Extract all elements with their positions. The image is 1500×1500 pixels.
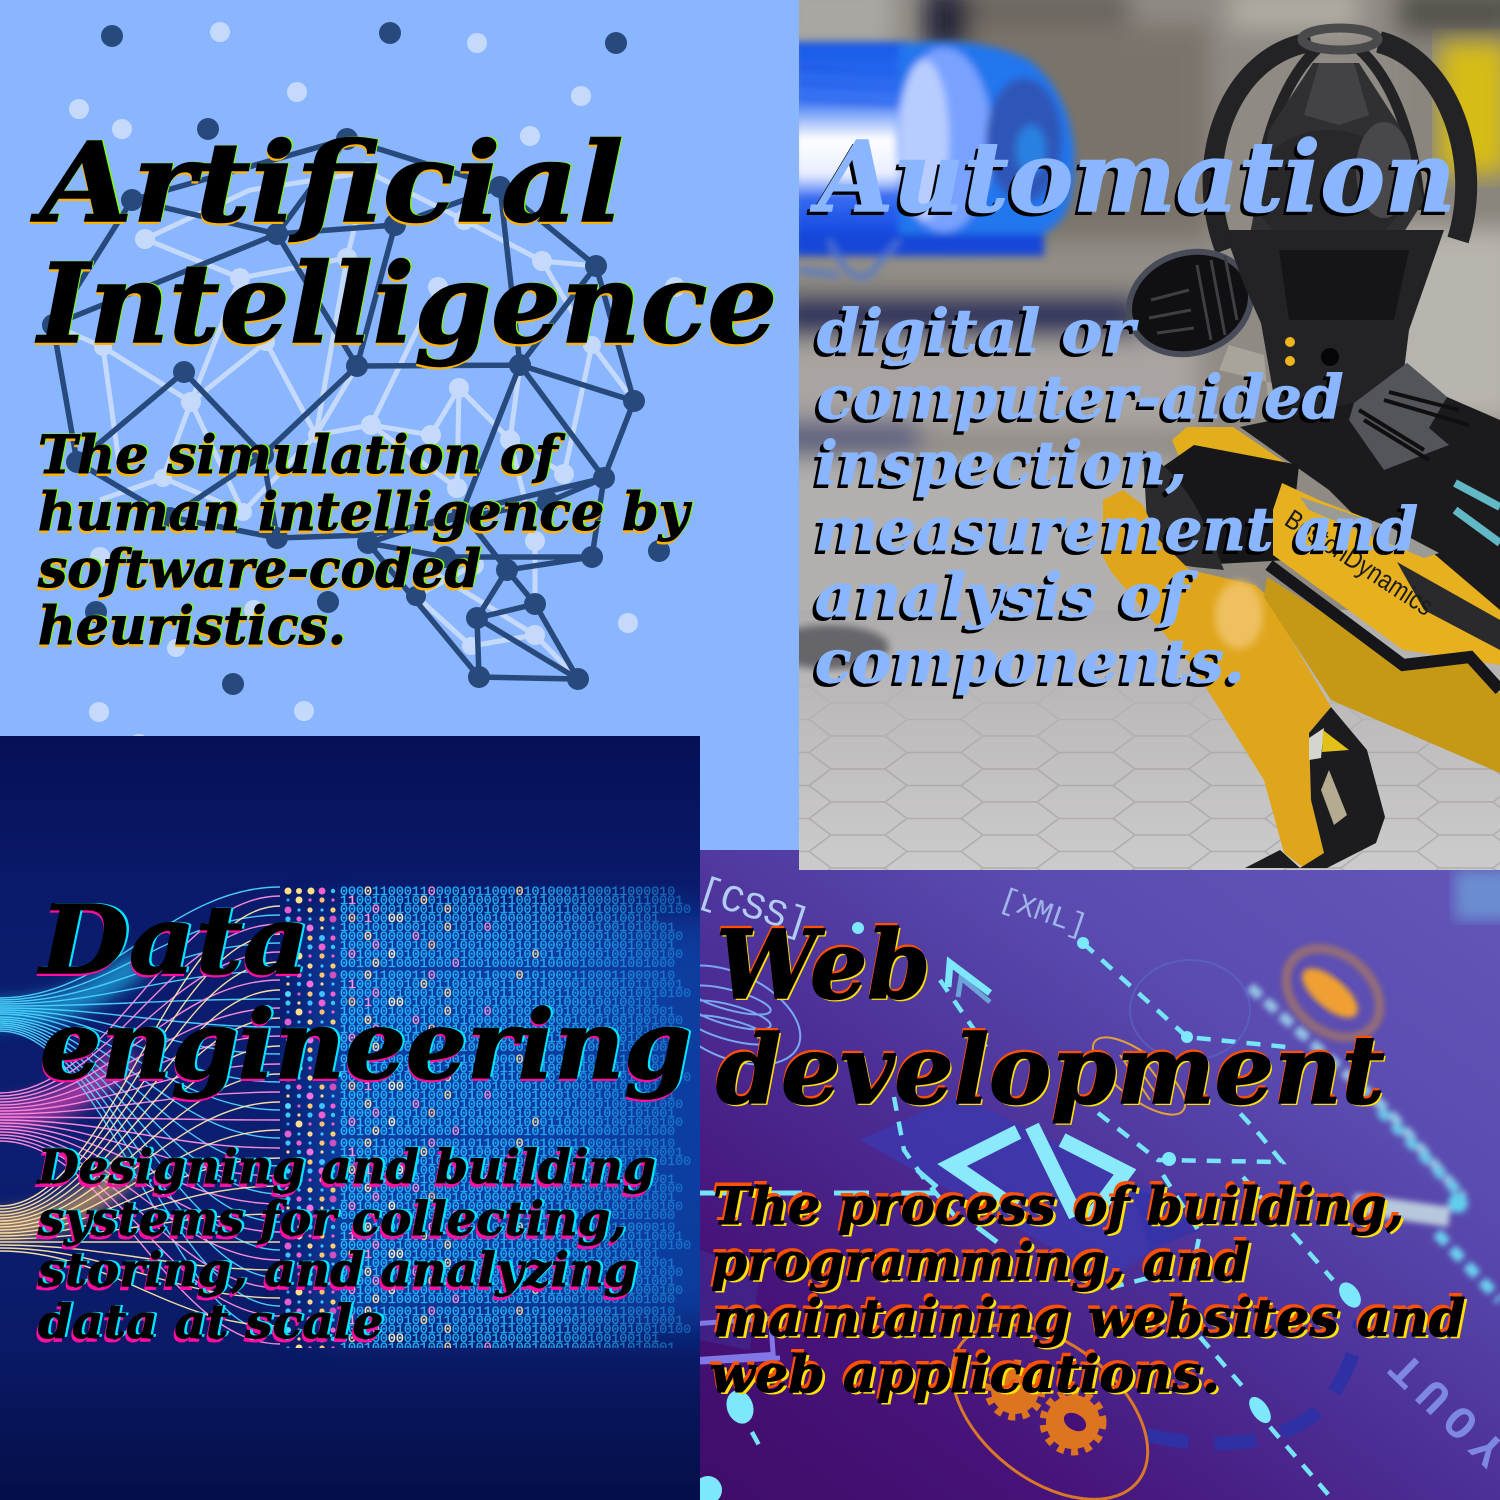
text: data engineering description: data at scale	[38, 1295, 383, 1350]
labels CSS, XML and LAYOUT	[692, 871, 1500, 1500]
panel: automation	[799, 0, 1500, 870]
robot hind foot	[1300, 707, 1385, 868]
heading: Data engineering: engineering	[40, 990, 691, 1100]
robot body dark	[1240, 363, 1500, 615]
text: automation description: computer-aided	[817, 363, 1343, 433]
robot yellow body and leg	[1172, 427, 1289, 470]
BostonDynamics label: BostonDynamics	[1280, 504, 1439, 622]
text: automation description: digital or	[817, 297, 1135, 367]
text: AI description: software-coded	[38, 539, 481, 600]
text: data engineering description	[34, 1140, 658, 1350]
text: AI description: The simulation of	[38, 425, 558, 486]
heading: Web development: development	[716, 1014, 1385, 1126]
text: web development description: The process of building,	[713, 1177, 1404, 1237]
text: automation description: components.	[815, 627, 1245, 697]
robot photo illustration	[799, 0, 1500, 870]
labels CSS, XML and LAYOUT: [XML]	[995, 883, 1091, 945]
blue lamp	[794, 41, 1075, 277]
text: data engineering description: systems for collecting,	[38, 1192, 626, 1247]
text: web development description: web applications.	[710, 1345, 1220, 1405]
text: AI description: heuristics.	[38, 596, 346, 657]
robot sensor cage	[1213, 42, 1466, 250]
text: web development description: maintaining websites and	[713, 1289, 1465, 1349]
heading: Artificial Intelligence: Artificial	[40, 118, 623, 247]
text: automation description: measurement and	[815, 495, 1418, 565]
text: AI description	[37, 425, 694, 657]
heading: Data engineering	[36, 885, 692, 1102]
text: web development description: programming, and	[711, 1233, 1250, 1293]
robot fan heatsink	[1116, 236, 1264, 370]
text: AI description: human intelligence by	[38, 482, 689, 543]
heading: Web development: Web	[716, 910, 931, 1021]
robot neck and sensors	[1224, 230, 1444, 425]
heading: Artificial Intelligence	[30, 118, 777, 370]
blurred background	[779, 0, 1500, 700]
text: automation description	[812, 297, 1418, 699]
heading: Artificial Intelligence: Intelligence	[38, 239, 777, 368]
text: data engineering description: Designing and building	[38, 1140, 656, 1195]
panel: web development	[700, 850, 1500, 1500]
panel: data engineering	[0, 736, 700, 1500]
data stream background illustration	[0, 886, 700, 1348]
heading: Web development	[716, 910, 1386, 1126]
web circuit background illustration	[700, 870, 1500, 1500]
text: automation description: inspection,	[815, 429, 1187, 499]
heading: Data engineering: Data	[40, 885, 309, 996]
heading: Automation: Automation	[818, 120, 1456, 234]
panel: artificial intelligence	[0, 0, 800, 740]
brain network illustration	[42, 22, 684, 736]
text: automation description: analysis of	[815, 561, 1189, 631]
text: web development description	[710, 1177, 1468, 1405]
text: data engineering description: storing, and analyzing	[38, 1243, 637, 1298]
